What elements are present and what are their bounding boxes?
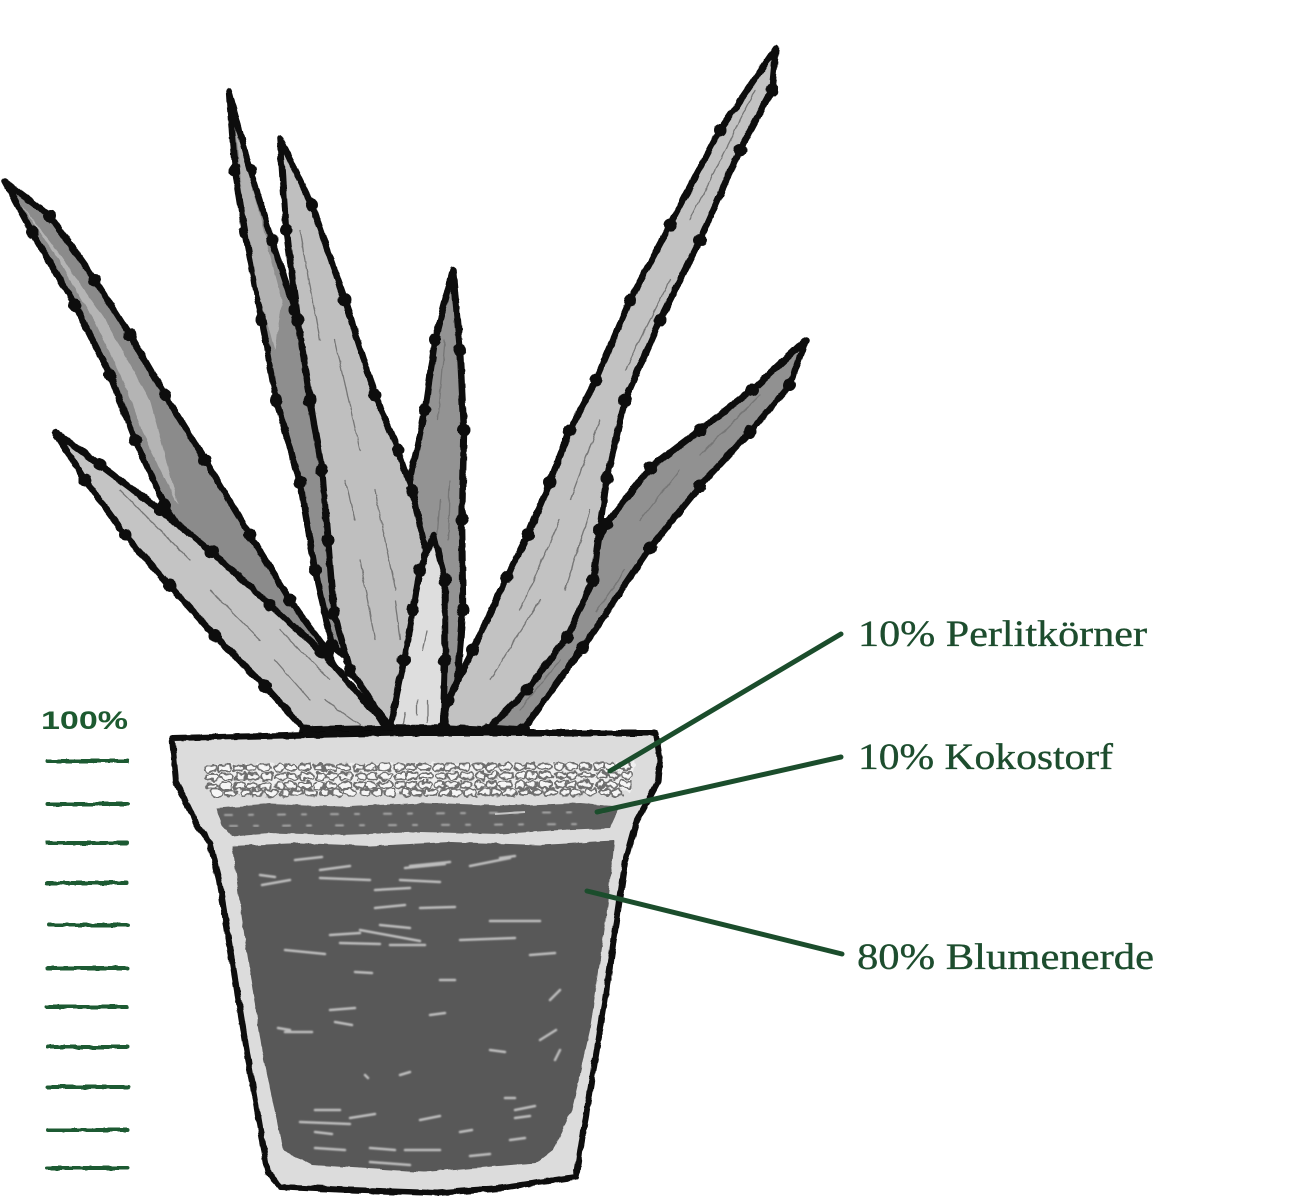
plant pot [172,733,660,1193]
soil layer: 10% coconut peat [216,803,620,836]
leaf: tall back [229,92,350,660]
callout: coconut peat [597,737,1114,812]
leaf: front left [55,432,388,730]
scale ticks [47,761,128,1168]
soil layer: 10% perlite grains [205,762,634,794]
leaf: big centre [280,138,436,728]
callout: coconut peat: 10% Kokostorf [858,737,1114,778]
callout: perlite: 10% Perlitkörner [858,614,1147,655]
scale label: 100%: 100% [41,707,128,735]
callout: perlite [610,614,1147,771]
soil layer: 80% potting soil [232,841,614,1172]
aloe plant [5,48,806,730]
pot body [172,733,660,1193]
leaf: small front [390,535,445,728]
leaf: small centre back [408,270,464,700]
callout: potting soil [587,891,1154,978]
callout: potting soil: 80% Blumenerde [857,937,1154,978]
leaf: far left [5,182,345,690]
leaf: big right [444,48,776,730]
leaf: right back [490,340,806,730]
